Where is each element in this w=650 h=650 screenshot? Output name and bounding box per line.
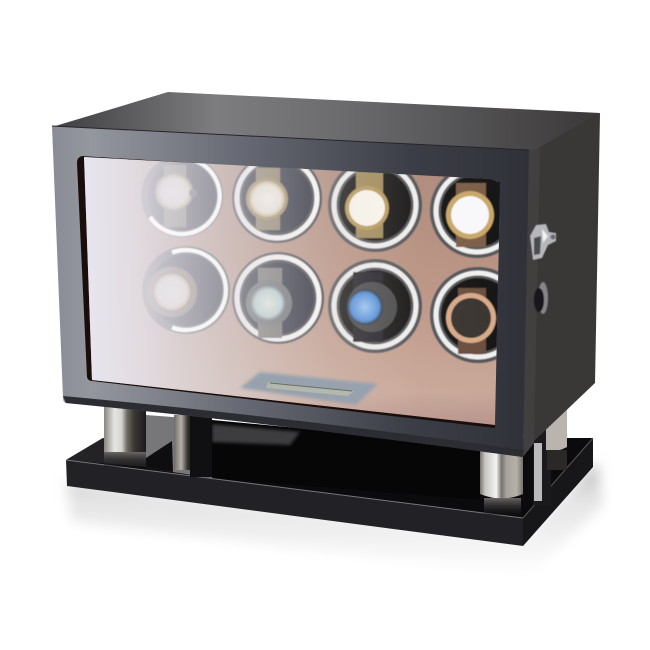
base plinth bbox=[66, 438, 593, 546]
door top edge line bbox=[52, 126, 529, 150]
winder row 1, position 2 bbox=[232, 166, 322, 244]
pale glass reflection bbox=[84, 157, 413, 413]
winder row 2, position 2 bbox=[232, 252, 324, 344]
control panel bbox=[240, 372, 378, 405]
winder row 2, position 1 bbox=[142, 246, 230, 334]
cabinet top surface bbox=[52, 92, 600, 152]
winder row 1, position 1 bbox=[141, 155, 223, 237]
latch bbox=[530, 224, 556, 260]
pillar: front left bbox=[104, 405, 146, 467]
winder row 2, position 4 bbox=[430, 266, 498, 364]
product photo: watch winder cabinet bbox=[52, 92, 606, 553]
hinge strip bbox=[523, 148, 540, 457]
key lock bbox=[534, 282, 548, 314]
white arc: row 2, position 1 bbox=[172, 250, 226, 330]
winder row 2, position 3 bbox=[328, 259, 422, 353]
rear backdrop under the cabinet bbox=[146, 415, 212, 478]
copper interior bbox=[80, 150, 505, 435]
door frame bbox=[52, 126, 529, 457]
winder row 1, position 4 bbox=[430, 176, 500, 258]
pillar: rear left bbox=[174, 415, 212, 477]
cabinet right side bbox=[533, 113, 600, 442]
pillar: front right bbox=[480, 448, 523, 515]
glass window bbox=[77, 156, 500, 428]
pillar: rear right bbox=[533, 395, 567, 505]
white arc: row 1, position 1 bbox=[150, 159, 220, 234]
floor reflection bbox=[66, 462, 603, 575]
winder row 1, position 3 bbox=[328, 171, 422, 252]
lower door bevel bbox=[63, 396, 524, 457]
